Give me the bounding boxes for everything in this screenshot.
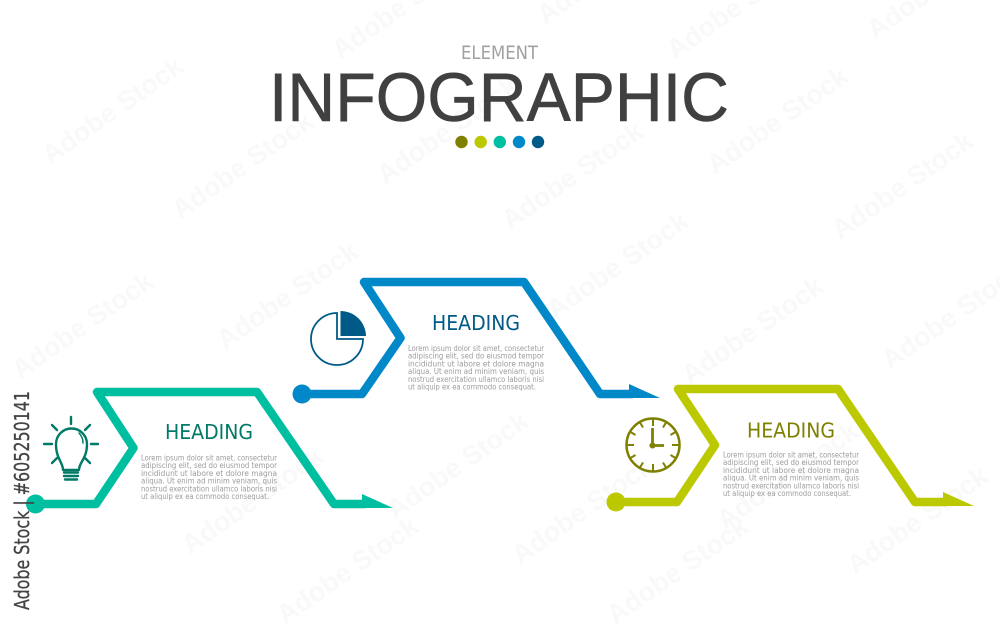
text: Adobe Stock <box>381 405 534 525</box>
text: Adobe Stock <box>826 125 979 245</box>
heading: HEADING <box>165 420 253 444</box>
title block <box>269 43 729 148</box>
icon: pie chart <box>311 311 366 365</box>
body text: adipiscing elit, sed do eiusmod tempor <box>723 458 860 467</box>
body text: Lorem ipsum dolor sit amet, consectetur <box>723 450 860 460</box>
panel: blue step <box>292 282 660 404</box>
text: Adobe Stock <box>541 205 694 325</box>
text: Adobe Stock <box>6 265 159 385</box>
body text <box>408 344 545 392</box>
body text: nostrud exercitation ullamco laboris nisi <box>723 481 859 490</box>
lime arrow connector <box>606 389 974 512</box>
body text: aliqua. Ut enim ad minim veniam, quis <box>723 474 859 483</box>
body text: aliqua. Ut enim ad minim veniam, quis <box>408 367 544 376</box>
text: Adobe Stock <box>371 70 524 190</box>
body text: incididunt ut labore et dolore magna <box>723 466 859 475</box>
vertical stock id text: Adobe Stock | #605250141 <box>10 391 34 610</box>
heading: HEADING <box>432 311 520 335</box>
body text: ut aliquip ex ea commodo consequat. <box>408 382 536 392</box>
text: Adobe Stock <box>176 440 329 560</box>
body text: ut aliquip ex ea commodo consequat. <box>723 489 851 498</box>
icon: clock <box>626 418 680 472</box>
panel: lime step <box>606 389 974 512</box>
colour dots <box>455 136 544 148</box>
text: Adobe Stock <box>36 50 189 170</box>
icon: light bulb <box>44 417 98 480</box>
text: Adobe Stock <box>211 235 364 355</box>
body text: aliqua. Ut enim ad minim veniam, quis <box>141 477 277 486</box>
panel: teal step <box>26 392 393 514</box>
text: Adobe Stock <box>676 270 829 390</box>
text: Adobe Stock <box>711 415 864 535</box>
text: Adobe Stock <box>506 450 659 570</box>
text: Adobe Stock <box>166 105 319 225</box>
blue arrow connector <box>292 282 660 404</box>
text: Adobe Stock <box>496 115 649 235</box>
body text: nostrud exercitation ullamco laboris nisi <box>141 484 277 493</box>
body text: Lorem ipsum dolor sit amet, consectetur <box>141 454 278 462</box>
heading: HEADING <box>747 418 835 442</box>
body text: Lorem ipsum dolor sit amet, consectetur <box>408 344 545 353</box>
title: INFOGRAPHIC: INFOGRAPHIC <box>269 59 729 136</box>
teal arrow connector <box>26 392 393 514</box>
body text <box>723 450 860 498</box>
body text: nostrud exercitation ullamco laboris nisi <box>408 375 544 384</box>
body text: adipiscing elit, sed do eiusmod tempor <box>141 461 278 470</box>
text: Adobe Stock <box>841 460 994 580</box>
body text: adipiscing elit, sed do eiusmod tempor <box>408 352 545 361</box>
eyebrow: ELEMENT: ELEMENT <box>461 43 539 64</box>
body text: ut aliquip ex ea commodo consequat. <box>141 492 269 501</box>
text: Adobe Stock <box>701 60 854 180</box>
body text: incididunt ut labore et dolore magna <box>141 469 277 478</box>
body text: incididunt ut labore et dolore magna <box>408 359 544 368</box>
body text <box>141 454 278 501</box>
